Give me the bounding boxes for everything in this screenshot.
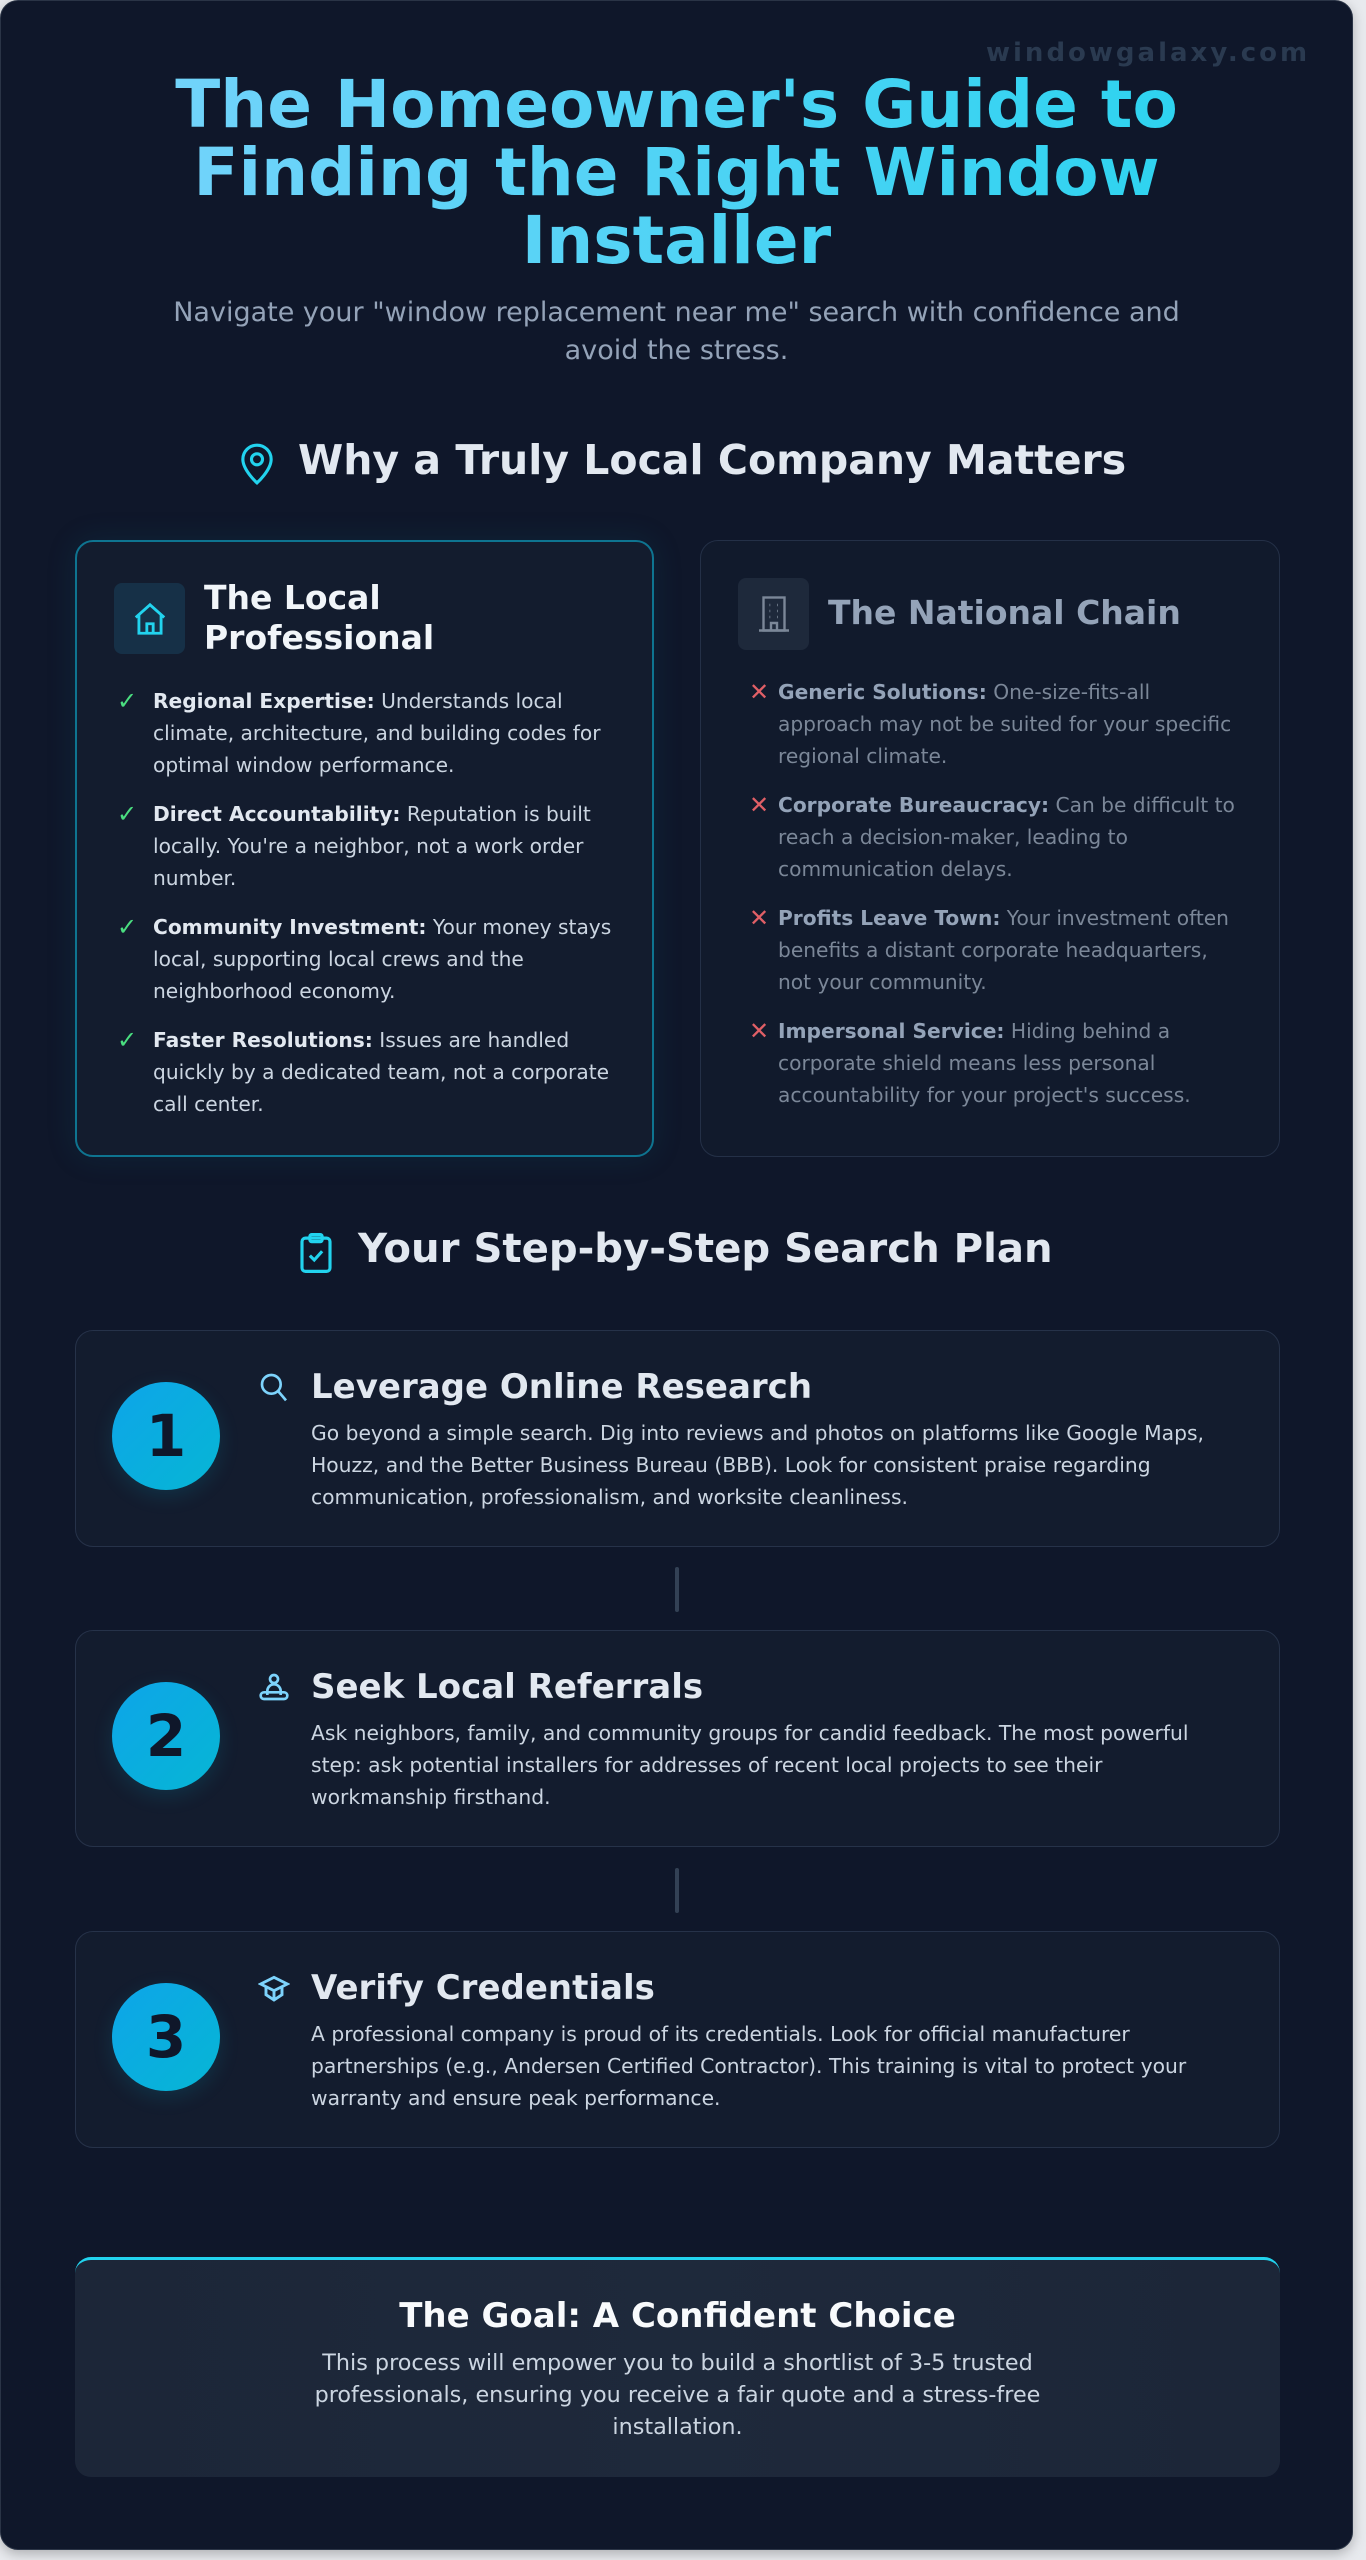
list: local benefits: locally. You're a neighbor, not a work order [153,834,583,858]
list: local benefits: local, supporting local crews and the [153,947,524,971]
heading: step-by-step [300,1226,1053,1273]
step body: workmanship firsthand. [311,1785,551,1809]
step body: step: ask potential installers for addresses of recent local projects to see their [311,1753,1102,1777]
card title: Professional [204,618,434,657]
step body: A professional company is proud of its credentials. Look for official manufacturer [311,2022,1130,2046]
title: The Homeowner's Guide to [175,66,1178,143]
step body [311,2022,1186,2110]
step body [311,1421,1204,1509]
step body: Houzz, and the Better Business Bureau (BBB). Look for consistent praise regarding [311,1453,1151,1477]
icon: people [259,1674,289,1700]
goal body: installation. [612,2414,743,2440]
step 3 [75,1931,1280,2148]
step body: Go beyond a simple search. Dig into reviews and photos on platforms like Google Maps, [311,1421,1204,1445]
card title: The National Chain [828,593,1181,632]
list: chain drawbacks: Profits Leave Town: Your investment often [778,906,1229,930]
number badge [112,1983,220,2091]
step title: Verify Credentials [311,1968,655,2008]
icon: house [114,583,185,654]
title: Finding the Right Window [193,134,1160,211]
icon: graduation badge [258,1976,290,2002]
goal title: The Goal: A Confident Choice [399,2296,956,2336]
icon: building [738,578,809,650]
list: chain drawbacks: Generic Solutions: One-size-fits-all [778,680,1150,704]
subtitle [173,297,1180,366]
number badge: 3 [146,2003,186,2071]
card title: The Local [204,578,381,617]
step title: Leverage Online Research [311,1367,812,1407]
list: chain drawbacks: Impersonal Service: Hiding behind a [778,1019,1170,1043]
subtitle: avoid the stress. [565,335,788,366]
list: chain drawbacks: regional climate. [778,744,947,768]
step body: Ask neighbors, family, and community groups for candid feedback. The most powerful [311,1721,1189,1745]
list: chain drawbacks: communication delays. [778,857,1013,881]
list: local benefits: Regional Expertise: Understands local [153,689,563,713]
list: chain drawbacks: Corporate Bureaucracy: Can be difficult to [778,793,1235,817]
panel: national chain [700,540,1280,1157]
icon: map pin [241,444,273,485]
step body: partnerships (e.g., Andersen Certified Contractor). This training is vital to protect your [311,2054,1186,2078]
list: local benefits: number. [153,866,236,890]
goal body: professionals, ensuring you receive a fair quote and a stress-free [315,2382,1040,2408]
connector [675,1868,679,1913]
list: chain drawbacks: ✕ [749,904,769,932]
icon: search [260,1374,287,1402]
list: chain drawbacks [749,678,1235,1107]
subtitle: Navigate your "window replacement near me" search with confidence and [173,297,1180,328]
watermark: windowgalaxy.com [986,38,1310,68]
list: local benefits: call center. [153,1092,264,1116]
step 2 [75,1630,1280,1847]
list: local benefits: ✓ [117,687,137,715]
title: Installer [522,202,831,279]
list: chain drawbacks: benefits a distant corporate headquarters, [778,938,1208,962]
icon: clipboard [300,1233,332,1273]
title [0,71,1353,275]
list: local benefits: Faster Resolutions: Issues are handled [153,1028,569,1052]
step body [311,1721,1189,1809]
list: local benefits: Direct Accountability: Reputation is built [153,802,591,826]
list: local benefits: quickly by a dedicated team, not a corporate [153,1060,609,1084]
list: local benefits: climate, architecture, and building codes for [153,721,601,745]
list: chain drawbacks: corporate shield means less personal [778,1051,1155,1075]
panel: local professional [75,540,654,1157]
step title: Seek Local Referrals [311,1667,703,1707]
list: chain drawbacks: ✕ [749,791,769,819]
goal body [315,2350,1040,2440]
list: chain drawbacks: ✕ [749,1017,769,1045]
list: local benefits [117,687,611,1116]
list: chain drawbacks: accountability for your project's success. [778,1083,1191,1107]
list: local benefits: ✓ [117,800,137,828]
list: local benefits: ✓ [117,913,137,941]
step 1 [75,1330,1280,1547]
connector [675,1567,679,1612]
number badge: 2 [146,1702,186,1770]
card title [204,578,434,657]
number badge: 1 [146,1402,186,1470]
heading text: Your Step-by-Step Search Plan [358,1226,1053,1272]
step body: communication, professionalism, and worksite cleanliness. [311,1485,908,1509]
step body: warranty and ensure peak performance. [311,2086,720,2110]
callout: goal [75,2257,1280,2477]
list: local benefits: optimal window performance. [153,753,454,777]
list: chain drawbacks: not your community. [778,970,987,994]
list: local benefits: ✓ [117,1026,137,1054]
goal body: This process will empower you to build a shortlist of 3-5 trusted [322,2350,1033,2376]
list: chain drawbacks: reach a decision-maker, leading to [778,825,1128,849]
list: chain drawbacks: approach may not be suited for your specific [778,712,1231,736]
list: local benefits: Community Investment: Your money stays [153,915,611,939]
list: local benefits: neighborhood economy. [153,979,395,1003]
heading: why local [241,436,1126,485]
number badge [112,1382,220,1490]
number badge [112,1682,220,1790]
heading text: Why a Truly Local Company Matters [298,436,1126,484]
list: chain drawbacks: ✕ [749,678,769,706]
